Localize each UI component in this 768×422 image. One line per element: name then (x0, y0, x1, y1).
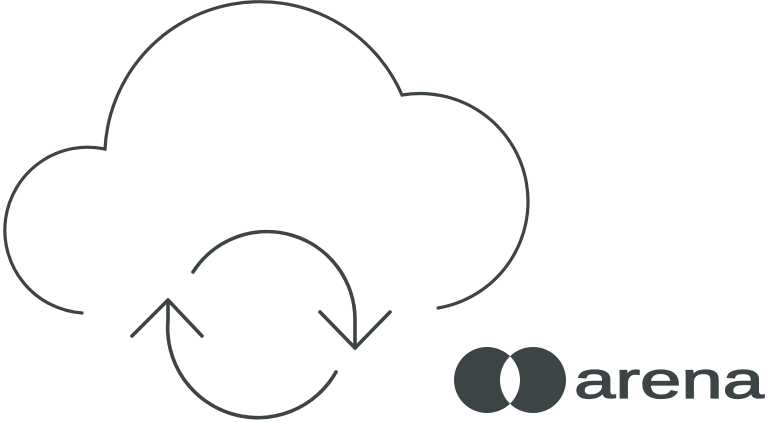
logo: arena (454, 347, 764, 413)
logo text: arena (574, 352, 764, 410)
icon: logo mark (454, 347, 566, 413)
icon: refresh arrows (132, 232, 390, 418)
icon: cloud outline (5, 2, 528, 313)
